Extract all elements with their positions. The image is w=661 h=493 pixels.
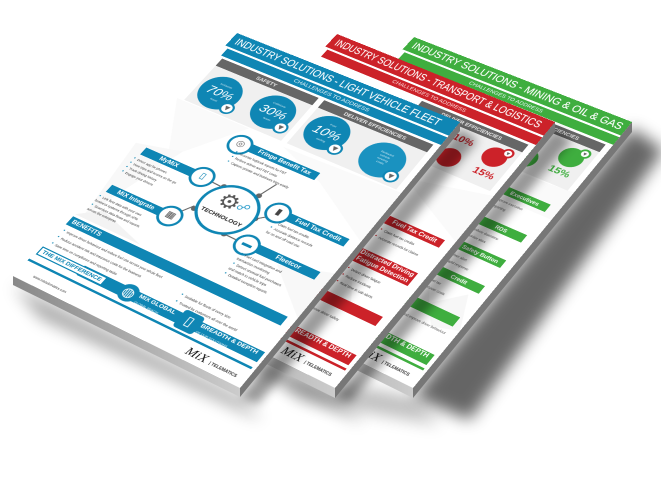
- icon: arrow badge costs: ▼: [383, 171, 398, 182]
- icon: fringe benefit node: ◎: [234, 138, 248, 149]
- bar: green benefits: [376, 282, 460, 327]
- bar: MiX Integrate: [106, 185, 173, 220]
- heading: safety: [216, 59, 319, 105]
- text: MyMiX bullets: •Engage your drivers: [120, 169, 154, 186]
- text: integrate bullets: business systems through APIs: [94, 198, 139, 221]
- stat: 10 percent: saving: [315, 137, 326, 143]
- stat: 30 percent: [241, 90, 305, 135]
- text: breadth and depth: [195, 246, 260, 355]
- icon: green stat circle left: [508, 145, 543, 170]
- stat: vehicle costs: Reduced: [380, 150, 395, 157]
- chart: technology hub connectors: [182, 182, 278, 240]
- text: integrate bullets: •Link fleet data with your own: [97, 193, 143, 217]
- heading: green deliver efficiencies: DELIVER EFFICIENCIES: [516, 112, 581, 141]
- bar: fringe benefit tax: [238, 140, 320, 180]
- heading: red challenges bar: [321, 50, 542, 145]
- bar: fringe benefit tax: Fringe Benefit Tax: [256, 149, 313, 176]
- icon: fringe benefit node: [221, 131, 259, 158]
- text: right bullets: •Scalable for fleets of every size: [180, 292, 232, 319]
- logo: red mix: MiX: [278, 344, 307, 364]
- bar: green credit: Credit: [449, 273, 469, 286]
- text: fleetcor bullets: and match to vehicle trips: [227, 266, 267, 287]
- icon: arrow badge costs: [379, 168, 402, 185]
- icon: arrow badge 70: ▼: [220, 103, 234, 113]
- text: integrate bullets: •Seamless data flows and reports: [90, 202, 141, 228]
- text: green benefits bullets: Reduce risk and improve driver behaviour: [384, 303, 447, 335]
- text: green executives bullets: Reporting: [490, 203, 507, 212]
- text: green credit bullets: Fuel tax: [428, 277, 442, 286]
- icon: arrow badge 10: ▼: [328, 143, 342, 154]
- icon: fuel pump node: ▮: [273, 207, 285, 217]
- text: footer small print: www.mixtelematics.com: [32, 275, 68, 294]
- decorative blue line: [27, 259, 253, 369]
- text: breadth and depth: BREADTH & DEPTH: [199, 323, 260, 355]
- stat: 30 percent: fewer: [262, 116, 272, 122]
- text: fuel bullets: •Claim fuel tax credits: [273, 220, 310, 239]
- stat: 30 percent: 30%: [256, 102, 290, 123]
- icon: fuel pump node: [259, 199, 297, 227]
- bar: fleetcor: Fleetcor: [274, 254, 303, 271]
- text: green credit bullets: [423, 277, 446, 296]
- heading: deliver efficiencies: DELIVER EFFICIENCIES: [342, 111, 408, 141]
- heading: safety: SAFETY: [255, 75, 279, 88]
- icon: integrate node: [151, 202, 189, 230]
- icon: circuit: ☍: [233, 200, 253, 215]
- text: integrate bullets: [86, 193, 143, 228]
- icon: green stat circle right: [553, 145, 589, 171]
- icon: red stat circle left: [431, 145, 466, 170]
- text: fleetcor bullets: transaction monitoring: [236, 257, 271, 275]
- text: green RDS bullets: Monitor sites: [466, 233, 487, 244]
- heading: blue challenges bar: [221, 49, 447, 145]
- icon: device: [172, 309, 206, 335]
- heading: deliver efficiencies: [318, 100, 433, 152]
- text: fleetcor bullets: [223, 251, 283, 294]
- bar: red breadth and depth: [253, 309, 357, 365]
- panel: green stats: [460, 109, 599, 191]
- text: right bullets: •Trusted by customers all over the world: [174, 298, 238, 332]
- text: benefits bullets: •Improve driver behaviour and reduce fuel use across your whole fleet: [62, 228, 164, 279]
- bar: the MiX difference band: [76, 266, 265, 362]
- icon: arrow badge 70: [216, 101, 238, 116]
- text: fuel bullets: •Accurate distance records: [269, 225, 314, 247]
- text: MyMiX bullets: •Driver app for phones: [132, 156, 168, 174]
- icon: vehicle node: ▬: [240, 238, 256, 250]
- text: benefits bullets: [50, 228, 251, 279]
- text: fleetcor bullets: •Detailed exception reports: [223, 270, 268, 294]
- text: MyMiX bullets: [120, 146, 246, 186]
- panel: safety stats: [184, 66, 312, 141]
- bar: green executives: Executives: [509, 190, 541, 207]
- heading: red deliver efficiencies: [416, 101, 528, 152]
- logo: green telematics: | TELEMATICS: [381, 360, 410, 377]
- text: MiX global: MIX GLOBAL: [137, 293, 178, 316]
- heading: green title bar: INDUSTRY SOLUTIONS - MINING & OIL & GAS: [409, 41, 626, 132]
- bar: green safety button: Safety Button: [461, 244, 500, 264]
- icon: arrow badge 10: [323, 141, 346, 157]
- icon: integrate node: ▦: [163, 209, 179, 221]
- bar: green breadth and depth: [353, 320, 435, 365]
- bar: fuel tax credit: [275, 209, 350, 247]
- text: fringe bullets: •Reduce admin and FBT costs: [230, 154, 278, 178]
- logo: green mix: MiX: [356, 344, 385, 364]
- text: MiX global: [133, 246, 251, 316]
- text: green benefits bullets: Lower cost: [378, 309, 396, 320]
- bar: green breadth and depth: BREADTH & DEPTH: [367, 325, 430, 359]
- text: green safety bullets: Rapid response: [444, 258, 470, 271]
- text: technology: TECHNOLOGY: [199, 205, 243, 228]
- text: MyMiX bullets: •View trips and scores on the go: [128, 160, 177, 184]
- stat: 10 percent: 10%: [309, 122, 344, 144]
- text: fleetcor bullets: •Fuel card integration and: [239, 251, 283, 274]
- text: red benefits bullets: Lower costs: [278, 299, 298, 310]
- panel: red stats: [383, 108, 522, 191]
- stat: 10 percent: [294, 110, 359, 156]
- logo: telematics: | TELEMATICS: [208, 361, 238, 378]
- text: red 10 percent: 10%: [450, 131, 477, 148]
- text: benefits bullets: •Reduce accident risk and insurance costs for the business: [56, 234, 142, 278]
- text: red fuel tax bullets: •Accurate records for claims: [373, 233, 419, 257]
- text: red 15 percent: 15%: [470, 164, 497, 182]
- bar: benefits: [66, 216, 288, 326]
- decorative green line: [341, 329, 425, 370]
- text: right bullets: [174, 246, 251, 332]
- icon: device: ▯: [180, 313, 198, 329]
- text: green RDS bullets: Reduce downtime: [471, 226, 500, 241]
- stat: vehicle costs: costs: [375, 160, 385, 165]
- heading: green deliver efficiencies: [492, 102, 606, 152]
- stat: 70 percent: Incidents: [220, 82, 233, 90]
- text: fringe bullets: •Accurate logbook reports for FBT: [234, 150, 287, 175]
- text: green safety bullets: Driver alert: [449, 252, 468, 262]
- stat: vehicle costs: running: [376, 156, 389, 163]
- icon: globe: [113, 281, 144, 305]
- panel: efficiency stats: [287, 108, 427, 189]
- heading: blue challenges bar: CHALLENGES TO ADDRESS: [292, 78, 371, 113]
- text: red distracted bullets: •Detect driver fatigue: [346, 265, 382, 284]
- icon: gear: ⚙: [212, 188, 247, 215]
- logo: mix: MiX: [182, 344, 212, 365]
- bar: red distracted driving: Fatigue Detection: [354, 255, 410, 284]
- bar: red fuel tax credit: [384, 216, 445, 248]
- icon: red arrow badge: [499, 147, 517, 160]
- bar: MyMiX: MyMiX: [158, 156, 180, 169]
- bar: red benefits: [269, 267, 383, 326]
- bar: red distracted driving: Distracted Driving: [359, 249, 416, 278]
- panel: blue light vehicle fleet brochure: [13, 33, 460, 388]
- text: red benefits bullets: Reduce risk and improve driver safety: [283, 293, 340, 322]
- bar: green safety button: [455, 240, 506, 268]
- bar: fuel tax credit: Fuel Tax Credit: [294, 218, 343, 243]
- bar: benefits: BENEFITS: [70, 219, 103, 238]
- bar: fleetcor: [244, 240, 321, 280]
- text: fringe bullets: •Capture private and business trips easily: [226, 159, 290, 189]
- icon: green arrow badge: ▼: [580, 151, 590, 158]
- chart: technology hub: [182, 176, 273, 244]
- stat: 70 percent: [188, 71, 252, 115]
- heading: red challenges bar: CHALLENGES TO ADDRESS: [390, 79, 468, 113]
- bar: red breadth and depth: BREADTH & DEPTH: [289, 325, 352, 359]
- text: red distracted bullets: •Real time in cab alerts: [335, 278, 374, 299]
- bar: green RDS: [476, 215, 527, 243]
- bar: green credit: [433, 265, 485, 294]
- bar: red distracted driving: [351, 248, 418, 286]
- text: red fuel tax bullets: •Claim fuel tax credits: [379, 227, 415, 246]
- icon: vehicle node: [227, 231, 266, 260]
- text: green 15 percent: 15%: [546, 163, 573, 180]
- icon: arrow badge 30: [269, 120, 292, 136]
- text: benefits bullets: •Save time on compliance and reporting tasks: [50, 241, 118, 276]
- text: red distracted bullets: •Reduce incidents: [340, 272, 372, 289]
- text: fleetcor bullets: •Detect unusual fuel purchases: [231, 261, 282, 287]
- bar: red fuel tax credit: Fuel Tax Credit: [391, 219, 439, 244]
- text: red distracted bullets: [335, 265, 382, 299]
- bar: MiX Integrate: MiX Integrate: [115, 190, 156, 211]
- icon: arrow badge 30: ▼: [273, 122, 288, 133]
- heading: blue title bar: INDUSTRY SOLUTIONS - LIGHT VEHICLE FLEET: [232, 37, 444, 128]
- stat: 70 percent: fewer: [209, 97, 218, 103]
- bar: green RDS: RDS: [493, 224, 509, 234]
- text: fuel bullets: for on and off road use: [265, 230, 301, 248]
- text: integrate bullets: across the enterprise: [86, 207, 117, 223]
- icon: red stat circle right: [476, 144, 513, 170]
- stat: 30 percent: Collisions: [272, 101, 287, 109]
- text: fringe bullets: [226, 146, 290, 240]
- decorative red line: [234, 314, 347, 371]
- stat: 10 percent: Fuel: [329, 123, 337, 128]
- heading: green challenges bar: [398, 52, 619, 145]
- logo: red telematics: | TELEMATICS: [303, 360, 333, 377]
- text: green executives bullets: Improve executive: [495, 197, 524, 211]
- text: green safety bullets: [444, 252, 470, 271]
- stat: vehicle costs: [349, 136, 415, 184]
- text: MiX global: GLOBAL REACH: [133, 300, 159, 315]
- icon: red arrow badge: ▼: [504, 150, 513, 157]
- text: breadth and depth: OF OUR SOLUTIONS: [195, 330, 228, 348]
- panel: red transport and logistics brochure: [113, 34, 555, 388]
- text: green credit bullets: Recover costs: [423, 283, 446, 296]
- icon: green arrow badge: [576, 148, 594, 160]
- icon: globe: ◍: [118, 284, 140, 301]
- icon: MyMiX phone node: [183, 163, 221, 191]
- stat: 70 percent: 70%: [203, 83, 237, 103]
- icon: MyMiX phone node: ▯: [197, 171, 209, 181]
- heading: red title bar: INDUSTRY SOLUTIONS - TRANSPORT & LOGISTICS: [332, 38, 544, 130]
- heading: red deliver efficiencies: DELIVER EFFICIENCIES: [440, 112, 504, 141]
- panel: green mining and oil and gas brochure: [191, 37, 632, 388]
- heading: the MiX difference tag: THE MIX DIFFERENCE: [40, 249, 103, 282]
- stat: vehicle costs: vehicle: [379, 153, 391, 160]
- bar: MyMiX: [140, 148, 205, 180]
- text: MyMiX bullets: •Track driving history: [124, 164, 158, 182]
- heading: green challenges bar: CHALLENGES TO ADDRESS: [467, 80, 545, 114]
- bar: green executives: [499, 185, 551, 212]
